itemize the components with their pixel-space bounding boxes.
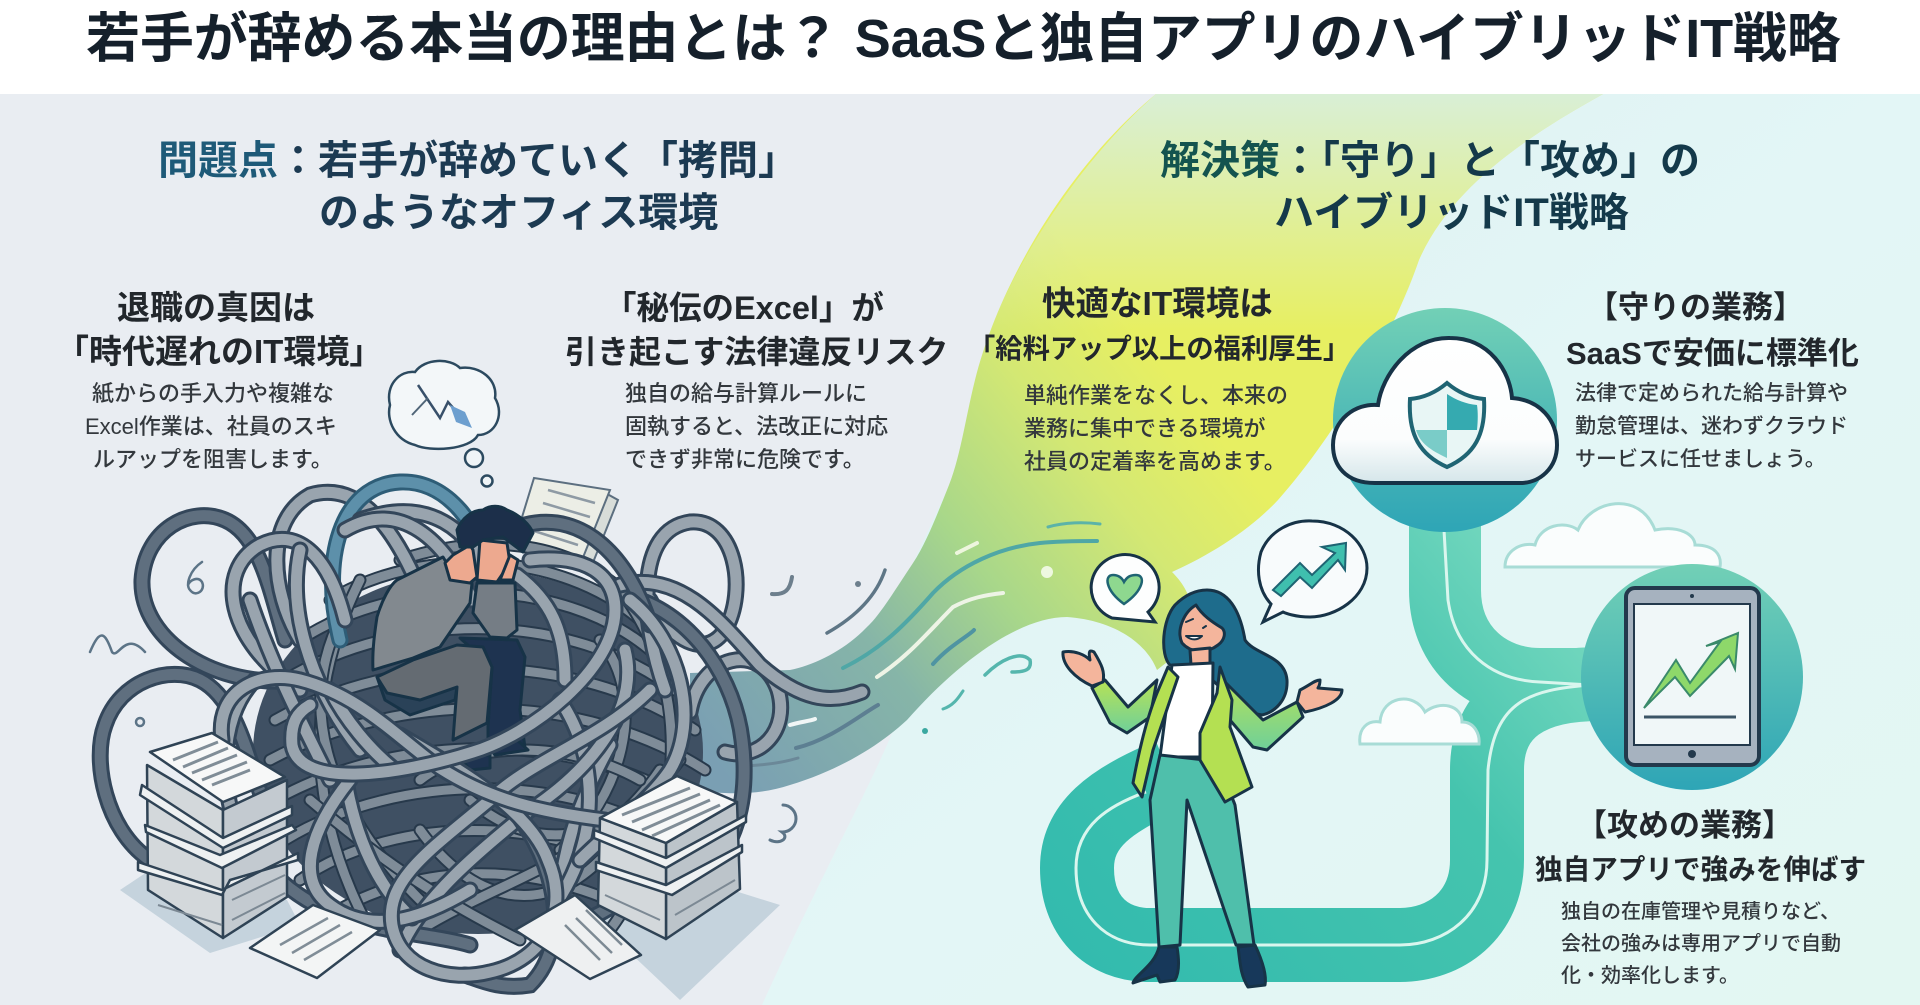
front leg xyxy=(377,645,492,740)
transition wave xyxy=(690,94,1603,793)
text block: offensive work xyxy=(1535,808,1866,987)
heading: solution: ハイブリッドIT戦略 xyxy=(1274,191,1629,235)
text block: offensive work: 【攻めの業務】 xyxy=(1576,808,1793,843)
left hand xyxy=(1063,651,1104,686)
right hand xyxy=(500,555,518,580)
icon: growth arrow xyxy=(1273,543,1346,596)
heading: problem: のようなオフィス環境 xyxy=(319,191,718,235)
text block: comfortable IT: 単純作業をなくし、本来の xyxy=(1024,383,1288,408)
title band xyxy=(0,0,1920,94)
text block: comfortable IT: 快適なIT環境は xyxy=(1042,286,1273,323)
text block: true cause: 「時代遅れのIT環境」 xyxy=(56,333,382,370)
pants xyxy=(1150,755,1254,947)
torso xyxy=(373,557,472,670)
shoes xyxy=(1133,947,1178,983)
paper stack right xyxy=(594,776,746,939)
motion lines between panels xyxy=(745,523,1100,766)
icon: thought bubble xyxy=(389,361,499,486)
text block: comfortable IT: 「給料アップ以上の福利厚生」 xyxy=(968,333,1350,364)
hair xyxy=(1164,590,1287,715)
under-thigh shadow xyxy=(377,677,457,715)
text block: offensive work: 会社の強みは専用アプリで自動 xyxy=(1561,933,1841,955)
text block: Excel risk: 固執すると、法改正に対応 xyxy=(625,414,888,439)
icon: tablet xyxy=(1626,588,1759,765)
title: 若手が辞める本当の理由とは？ SaaSと独自アプリのハイブリッドIT戦略 xyxy=(86,9,1841,69)
text block: defensive work xyxy=(1566,290,1859,471)
text block: comfortable IT: 業務に集中できる環境が xyxy=(1024,416,1266,441)
hair xyxy=(457,506,533,552)
floor shadows under stacks xyxy=(120,870,780,1000)
icon: loose paper behind tangle xyxy=(515,478,618,570)
icon: cloud xyxy=(1333,338,1557,483)
text block: comfortable IT xyxy=(968,286,1350,474)
road: hybrid path xyxy=(1076,525,1600,945)
text block: defensive work: 【守りの業務】 xyxy=(1587,290,1804,325)
front wires xyxy=(221,559,684,986)
paper stack left xyxy=(138,733,298,938)
text block: Excel risk: できず非常に危険です。 xyxy=(625,447,865,472)
text block: true cause: ルアップを阻害します。 xyxy=(93,447,333,472)
icon: cloud lower middle xyxy=(1360,699,1479,744)
text block: defensive work: サービスに任せましょう。 xyxy=(1575,448,1826,471)
eyes and smile xyxy=(1186,619,1206,639)
other shoe xyxy=(460,755,490,770)
neck xyxy=(1190,648,1210,680)
text block: defensive work: SaaSで安価に標準化 xyxy=(1566,336,1859,371)
back leg xyxy=(460,638,525,752)
heading: problem xyxy=(158,139,798,235)
left hand xyxy=(445,545,477,583)
solution region background xyxy=(762,94,1920,1005)
text block: Excel risk: 独自の給与計算ルールに xyxy=(625,381,867,406)
tangled wires xyxy=(100,482,862,945)
jacket right xyxy=(1200,667,1252,802)
icon: heart xyxy=(1108,575,1142,604)
text block: defensive work: 勤怠管理は、迷わずクラウド xyxy=(1575,415,1848,438)
jacket left xyxy=(1133,667,1178,797)
icon: growth arrow xyxy=(1644,633,1738,708)
speech bubble: heart xyxy=(1091,555,1159,622)
text block: offensive work: 独自アプリで強みを伸ばす xyxy=(1535,854,1866,885)
text block: Excel risk: 引き起こす法律違反リスク xyxy=(565,334,948,370)
circle: defensive cloud badge xyxy=(1333,308,1557,532)
text block: offensive work: 独自の在庫管理や見積りなど、 xyxy=(1561,901,1840,923)
icon: cloud top right xyxy=(1505,504,1720,567)
text block: offensive work: 化・効率化します。 xyxy=(1561,965,1739,987)
face xyxy=(477,540,510,582)
text block: comfortable IT: 社員の定着率を高めます。 xyxy=(1024,449,1286,474)
heading: problem: 問題点：若手が辞めていく「拷問」 xyxy=(158,139,798,183)
right hand xyxy=(1297,680,1342,712)
loose paper bottom left xyxy=(250,905,380,978)
heading: solution: 解決策：「守り」と「攻め」の xyxy=(1160,139,1700,183)
text block: true cause: 退職の真因は xyxy=(117,289,315,326)
text block: Excel risk: 「秘伝のExcel」が xyxy=(604,290,884,326)
shirt xyxy=(1160,663,1213,757)
text block: defensive work: 法律で定められた給与計算や xyxy=(1575,382,1848,405)
icon: shield xyxy=(1410,383,1484,467)
speech bubble: growth xyxy=(1258,521,1367,622)
woman character xyxy=(1063,590,1342,987)
text block: true cause: 紙からの手入力や複雑な xyxy=(92,381,334,406)
text block: Excel risk xyxy=(565,290,948,472)
right arm xyxy=(1220,677,1303,750)
stressed man xyxy=(373,506,533,770)
shoe xyxy=(488,738,528,755)
text block: true cause: Excel作業は、社員のスキ xyxy=(85,414,337,439)
text block: true cause xyxy=(56,289,382,472)
wire ball core xyxy=(253,570,703,934)
left arm xyxy=(1092,680,1157,733)
face xyxy=(1180,605,1224,651)
doodles around tangle xyxy=(90,562,796,842)
loose paper bottom right xyxy=(515,895,641,979)
circle: tablet badge xyxy=(1581,564,1803,790)
heading: solution xyxy=(1160,139,1700,235)
far arm xyxy=(473,583,517,638)
